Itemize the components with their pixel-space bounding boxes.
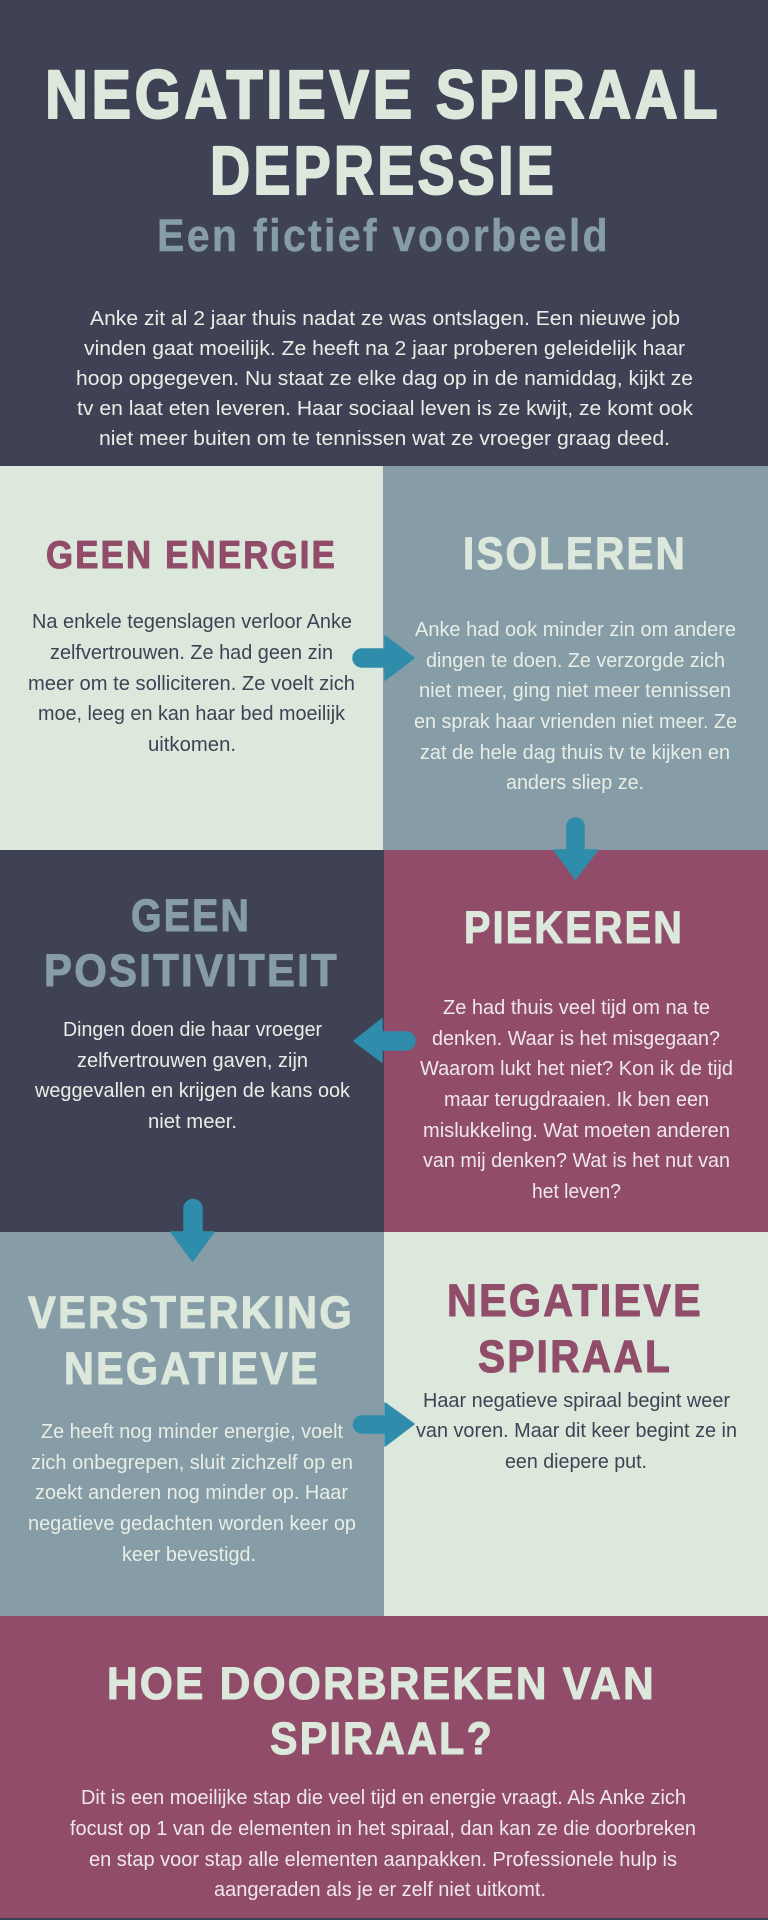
- body: geen positiviteit: Dingen doen die haar vroeger: [63, 1019, 322, 1041]
- heading: hoe doorbreken van spiraal: HOE DOORBREKEN VAN: [107, 1658, 656, 1709]
- heading: geen positiviteit: GEEN: [131, 890, 251, 941]
- body: piekeren: mislukkeling. Wat moeten anderen: [423, 1120, 730, 1142]
- heading: hoe doorbreken van spiraal: [107, 1658, 656, 1764]
- heading: geen energie: GEEN ENERGIE: [46, 534, 337, 577]
- arrow: piekeren to geen positiviteit: [354, 1019, 415, 1062]
- title: [45, 56, 721, 209]
- body: piekeren: Ze had thuis veel tijd om na te: [443, 997, 710, 1019]
- intro text: hoop opgegeven. Nu staat ze elke dag op in de namiddag, kijkt ze: [76, 368, 693, 390]
- body: versterking negatieve: zich onbegrepen, sluit zichzelf op en: [31, 1452, 353, 1474]
- panel: hoe doorbreken: [0, 1616, 768, 1918]
- body: hoe doorbreken: [70, 1787, 696, 1901]
- body: geen positiviteit: niet meer.: [148, 1111, 237, 1133]
- body: isoleren: en sprak haar vrienden niet meer. Ze: [414, 711, 737, 733]
- panel: versterking negatieve: [0, 1232, 384, 1616]
- heading: geen positiviteit: POSITIVITEIT: [44, 945, 339, 996]
- body: versterking negatieve: negatieve gedachten worden keer op: [28, 1513, 356, 1535]
- intro text: niet meer buiten om te tennissen wat ze vroeger graag deed.: [99, 428, 670, 450]
- heading: isoleren: ISOLEREN: [463, 528, 687, 579]
- arrow: geen positiviteit to versterking negatieve: [171, 1200, 214, 1261]
- body: geen energie: moe, leeg en kan haar bed moeilijk: [38, 703, 346, 725]
- subtitle: Een fictief voorbeeld: [157, 210, 610, 261]
- heading: negatieve spiraal: SPIRAAL: [478, 1331, 672, 1382]
- title: DEPRESSIE: [210, 132, 557, 209]
- body: geen positiviteit: zelfvertrouwen gaven, zijn: [77, 1050, 308, 1072]
- heading: negatieve spiraal: [447, 1275, 703, 1382]
- intro text: Anke zit al 2 jaar thuis nadat ze was ontslagen. Een nieuwe job: [90, 308, 680, 330]
- body: hoe doorbreken: Dit is een moeilijke stap die veel tijd en energie vraagt. Als Anke zich: [81, 1787, 686, 1809]
- body: hoe doorbreken: aangeraden als je er zelf niet uitkomt.: [214, 1879, 546, 1901]
- arrow: geen energie to isoleren: [353, 636, 414, 680]
- body: versterking negatieve: keer bevestigd.: [122, 1544, 256, 1566]
- panel: geen positiviteit: [0, 850, 384, 1232]
- body: geen energie: [28, 611, 355, 756]
- heading: versterking negatieve: VERSTERKING: [28, 1287, 354, 1338]
- panel: negatieve spiraal: [384, 1232, 768, 1616]
- intro text: [76, 308, 694, 450]
- body: geen positiviteit: weggevallen en krijgen de kans ook: [34, 1080, 351, 1102]
- body: hoe doorbreken: focust op 1 van de elementen in het spiraal, dan kan ze die doorbreken: [70, 1818, 696, 1840]
- body: isoleren: Anke had ook minder zin om andere: [415, 619, 736, 641]
- body: piekeren: van mij denken? Wat is het nut van: [423, 1150, 730, 1172]
- body: isoleren: [414, 619, 737, 794]
- body: geen energie: meer om te solliciteren. Ze voelt zich: [28, 673, 355, 695]
- body: versterking negatieve: zoekt anderen nog minder op. Haar: [35, 1482, 348, 1504]
- panel: header: [45, 56, 721, 450]
- body: isoleren: niet meer, ging niet meer tennissen: [419, 680, 731, 702]
- body: piekeren: Waarom lukt het niet? Kon ik de tijd: [420, 1058, 733, 1080]
- body: piekeren: [420, 997, 733, 1203]
- intro text: vinden gaat moeilijk. Ze heeft na 2 jaar proberen geleidelijk haar: [84, 338, 685, 360]
- body: isoleren: dingen te doen. Ze verzorgde zich: [426, 650, 725, 672]
- body: piekeren: denken. Waar is het misgegaan?: [432, 1028, 720, 1050]
- body: negatieve spiraal: een diepere put.: [505, 1451, 647, 1473]
- body: negatieve spiraal: Haar negatieve spiraal begint weer: [423, 1390, 730, 1412]
- arrow: versterking negatieve to negatieve spiraal: [354, 1403, 414, 1446]
- panel: geen energie: [0, 466, 383, 850]
- body: hoe doorbreken: en stap voor stap alle elementen aanpakken. Professionele hulp is: [89, 1849, 677, 1871]
- body: geen positiviteit: [34, 1019, 351, 1133]
- heading: versterking negatieve: [28, 1287, 354, 1394]
- arrow: isoleren to piekeren: [554, 818, 598, 879]
- heading: versterking negatieve: NEGATIEVE: [64, 1343, 320, 1394]
- heading: geen positiviteit: [44, 890, 339, 996]
- body: isoleren: zat de hele dag thuis tv te kijken en: [420, 742, 730, 764]
- body: geen energie: zelfvertrouwen. Ze had geen zin: [50, 642, 333, 664]
- panel: piekeren: [384, 850, 768, 1232]
- intro text: tv en laat eten leveren. Haar sociaal leven is ze kwijt, ze komt ook: [77, 398, 694, 420]
- body: negatieve spiraal: van voren. Maar dit keer begint ze in: [416, 1420, 737, 1442]
- body: versterking negatieve: [28, 1421, 356, 1566]
- body: piekeren: het leven?: [532, 1181, 621, 1203]
- body: versterking negatieve: Ze heeft nog minder energie, voelt: [41, 1421, 343, 1443]
- heading: piekeren: PIEKEREN: [464, 902, 684, 953]
- heading: hoe doorbreken van spiraal: SPIRAAL?: [270, 1713, 494, 1764]
- body: negatieve spiraal: [416, 1390, 737, 1473]
- body: piekeren: maar terugdraaien. Ik ben een: [444, 1089, 709, 1111]
- heading: negatieve spiraal: NEGATIEVE: [447, 1275, 703, 1326]
- body: geen energie: uitkomen.: [148, 734, 236, 756]
- body: isoleren: anders sliep ze.: [506, 772, 644, 794]
- panel: isoleren: [383, 466, 768, 850]
- body: geen energie: Na enkele tegenslagen verloor Anke: [32, 611, 352, 633]
